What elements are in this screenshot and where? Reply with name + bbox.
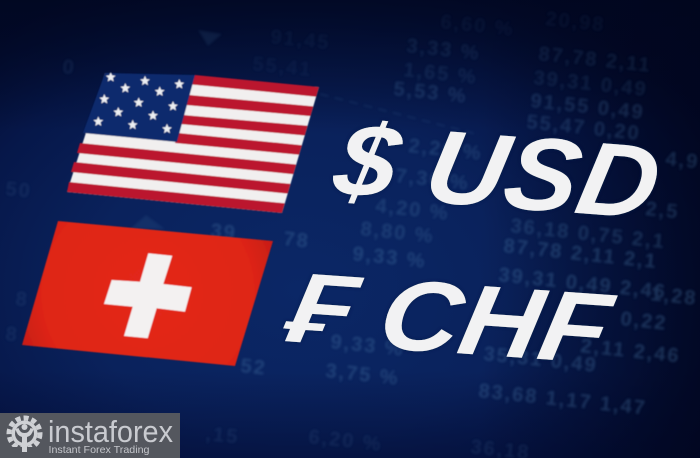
faded market numbers: 55,47 0,20 (525, 111, 642, 145)
US flag (67, 72, 319, 213)
faded market numbers: 52 (239, 355, 268, 380)
faded market numbers: 2,20 % (407, 135, 484, 165)
faded market numbers: 39,31 0,49 (532, 67, 649, 101)
faded market numbers: 39,31 0,49 2,46 (497, 264, 668, 304)
flag stripes (67, 73, 319, 213)
flag canton (83, 73, 195, 142)
faded market numbers: 8 (4, 323, 20, 346)
faded market numbers: 2,5 (644, 198, 680, 224)
faded market numbers: 6,60 % (439, 11, 516, 41)
faded market numbers: 50 (4, 178, 33, 203)
faded market numbers: 91,45 (269, 26, 332, 54)
faded market numbers: 7,30 % (394, 165, 471, 195)
faded market numbers: 36,18 0,75 2,1 (509, 215, 667, 253)
faded market numbers: 3,75 % (324, 360, 401, 390)
faded market numbers: 35,31 0,49 (482, 343, 599, 377)
faded market numbers: 6,20 % (307, 426, 384, 456)
icon: gear with figure (9, 418, 40, 458)
brand name: instaforex (48, 414, 173, 449)
label: $ USD: $ USD (324, 101, 670, 241)
icon: faded market trend markers (130, 30, 480, 229)
faded market numbers: 87,78 2,11 (537, 43, 653, 77)
faded market numbers: 9,33 % (351, 243, 428, 273)
faded market numbers: 78 (282, 228, 311, 253)
flag stars (93, 72, 184, 133)
faded market numbers: 87,78 2,11 2,1 (502, 235, 659, 273)
faded market numbers: 9,33 % (329, 331, 406, 361)
faded market numbers: 2,11 2,46 (579, 335, 682, 367)
faded market numbers: 0,22 (619, 308, 668, 335)
faded market numbers: 55,41 (251, 53, 314, 81)
Swiss flag (22, 221, 273, 366)
faded market numbers: 8 (14, 288, 30, 311)
faded market numbers: 20,98 (544, 8, 607, 36)
faded market numbers: 3,33 % (405, 35, 482, 65)
faded market numbers: 0 (61, 56, 77, 79)
faded market numbers: 1,28 (649, 283, 698, 310)
flag cross (104, 253, 192, 338)
logo panel (0, 413, 180, 458)
faded market numbers: 4,20 % (374, 195, 451, 225)
label: CHF: ₣ CHF (275, 252, 622, 385)
faded market numbers: 8,80 % (359, 218, 436, 248)
faded market numbers: 5,53 % (392, 78, 469, 108)
faded market numbers: 1,65 % (402, 59, 479, 89)
tagline: Instant Forex Trading (48, 444, 150, 456)
faded market numbers: 4,9 (664, 148, 700, 174)
faded market numbers: 39 (209, 220, 238, 245)
faded market numbers: ,15 (204, 423, 240, 449)
faded market numbers: 91,55 0,49 (529, 90, 646, 124)
faded market numbers: 83,68 1,17 1,47 (477, 380, 648, 420)
